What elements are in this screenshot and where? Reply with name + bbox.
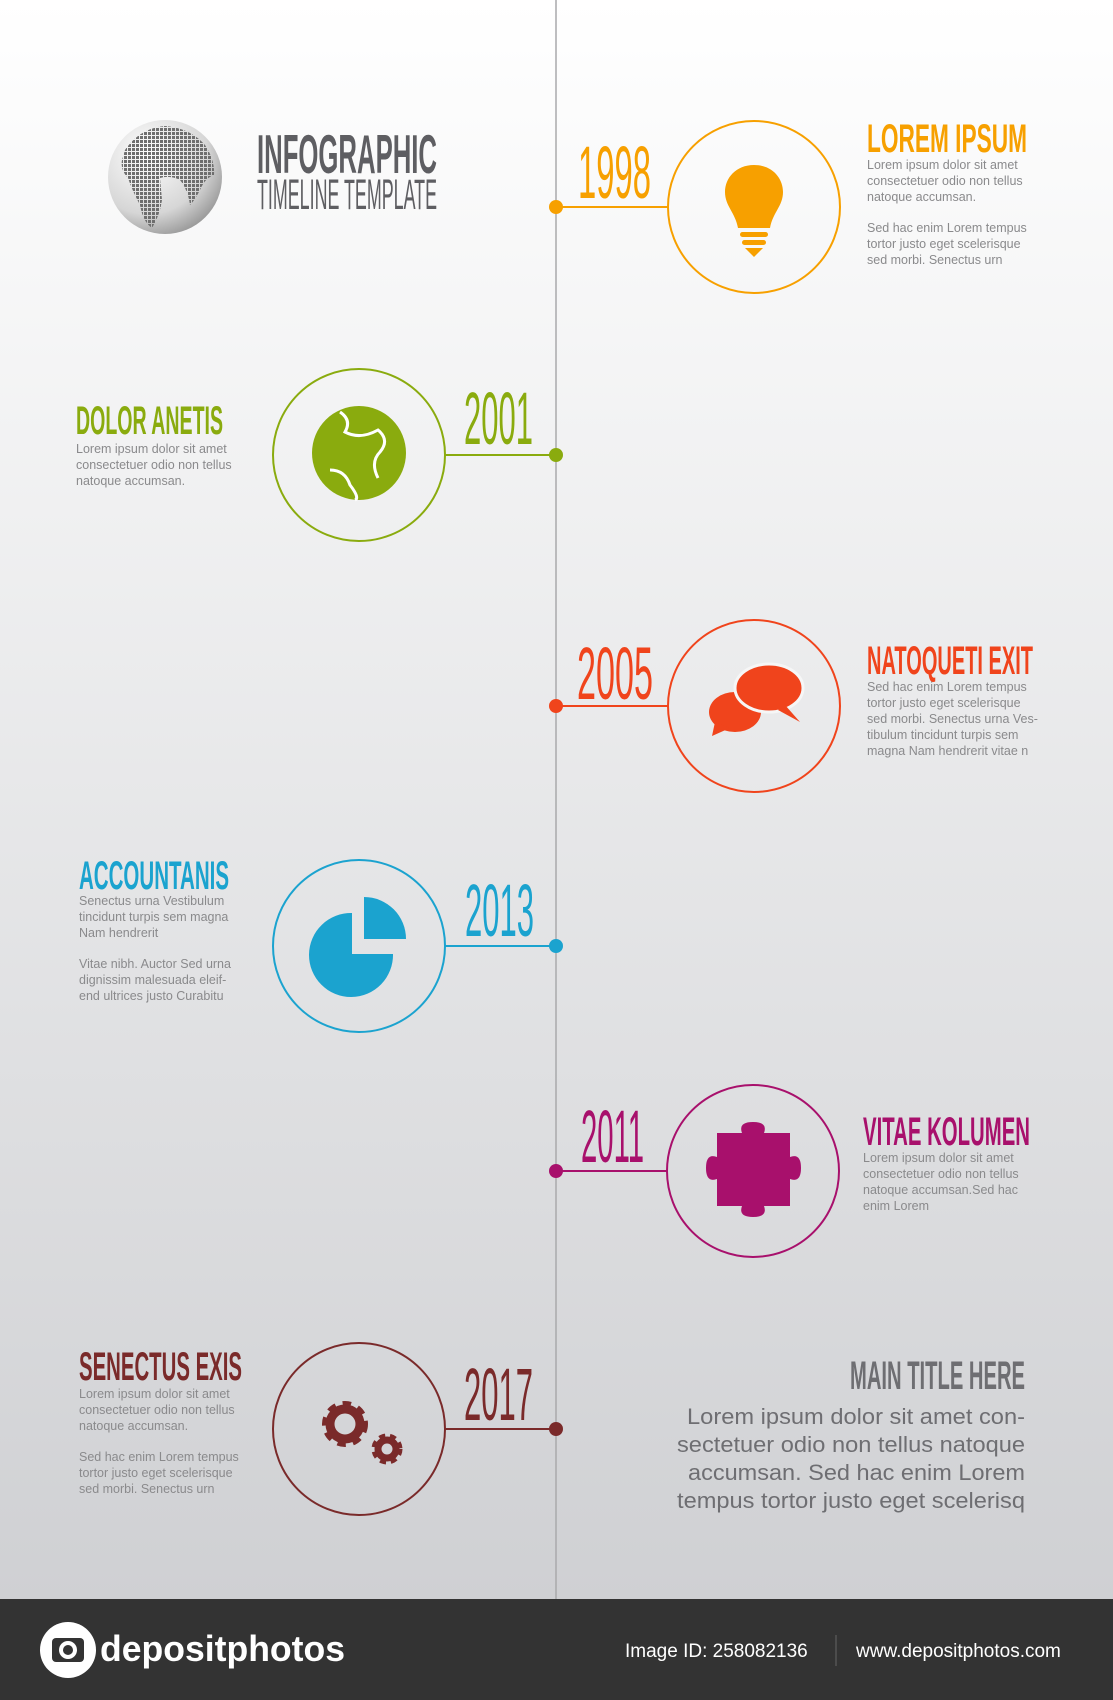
event 2011 (549, 1085, 1030, 1257)
event 2017: Lorem ipsum dolor sit amet (79, 1387, 230, 1401)
event 1998: natoque accumsan. (867, 190, 976, 204)
event 2005: sed morbi. Senectus urna Ves- (867, 712, 1038, 726)
event 2013: end ultrices justo Curabitu (79, 989, 224, 1003)
event 2013: Nam hendrerit (79, 926, 159, 940)
event 2013: Senectus urna Vestibulum (79, 894, 224, 908)
event 2011: consectetuer odio non tellus (863, 1167, 1019, 1181)
footer info: www.depositphotos.com (855, 1641, 1061, 1662)
footer logo: depositphotos (100, 1628, 345, 1669)
event 2005: tortor justo eget scelerisque (867, 696, 1021, 710)
text: INFOGRAPHIC (257, 123, 437, 185)
event 2013 (79, 854, 563, 1032)
event 2013: tincidunt turpis sem magna (79, 910, 228, 924)
event 2013: ACCOUNTANIS (79, 854, 229, 898)
icon: puzzle piece (706, 1122, 801, 1217)
event 2017: sed morbi. Senectus urn (79, 1482, 215, 1496)
event 2011: Lorem ipsum dolor sit amet (863, 1151, 1014, 1165)
event 2017 (79, 1343, 563, 1515)
icon: light bulb (725, 165, 783, 257)
event 1998: Sed hac enim Lorem tempus (867, 221, 1027, 235)
event 1998 (549, 117, 1027, 293)
timeline axis (555, 0, 557, 1599)
event 2005: Sed hac enim Lorem tempus (867, 680, 1027, 694)
event 2005: 2005 (577, 632, 653, 715)
icon: chat bubbles (709, 664, 803, 736)
event 2001: 2001 (464, 377, 533, 460)
icon: globe (108, 120, 222, 234)
event 2011: enim Lorem (863, 1199, 929, 1213)
event 2001: Lorem ipsum dolor sit amet (76, 442, 227, 456)
event 2011: natoque accumsan.Sed hac (863, 1183, 1018, 1197)
title text (257, 123, 437, 219)
main title block (677, 1354, 1025, 1513)
event 2017: Sed hac enim Lorem tempus (79, 1450, 239, 1464)
icon: earth (312, 406, 406, 500)
event 2001 (76, 369, 563, 541)
event 2001: natoque accumsan. (76, 474, 185, 488)
footer bar (0, 1599, 1113, 1700)
title block (108, 120, 437, 234)
event 2017: tortor justo eget scelerisque (79, 1466, 233, 1480)
event 2001: consectetuer odio non tellus (76, 458, 232, 472)
main title block: tempus tortor justo eget scelerisq (677, 1488, 1025, 1513)
icon: gears (328, 1407, 398, 1460)
event 2017: consectetuer odio non tellus (79, 1403, 235, 1417)
event 2013: Vitae nibh. Auctor Sed urna (79, 957, 231, 971)
main title block: sectetuer odio non tellus natoque (677, 1432, 1025, 1457)
event 2013: dignissim malesuada eleif- (79, 973, 226, 987)
text: TIMELINE TEMPLATE (257, 171, 437, 219)
footer info: Image ID: 258082136 (625, 1641, 808, 1662)
event 1998: 1998 (578, 131, 651, 214)
event 1998: consectetuer odio non tellus (867, 174, 1023, 188)
main title block: Lorem ipsum dolor sit amet con- (687, 1404, 1025, 1429)
event 1998: Lorem ipsum dolor sit amet (867, 158, 1018, 172)
event 2017: SENECTUS EXIS (79, 1345, 242, 1389)
event 2017: 2017 (464, 1353, 533, 1436)
event 1998: sed morbi. Senectus urn (867, 253, 1003, 267)
event 2005: magna Nam hendrerit vitae n (867, 744, 1028, 758)
event 2017: natoque accumsan. (79, 1419, 188, 1433)
event 1998: tortor justo eget scelerisque (867, 237, 1021, 251)
icon: pie chart (309, 897, 406, 997)
event 2013: 2013 (465, 869, 534, 952)
event 2005: tibulum tincidunt turpis sem (867, 728, 1018, 742)
event 2005 (549, 620, 1038, 792)
event 2001: DOLOR ANETIS (76, 399, 223, 443)
footer info (625, 1635, 1061, 1666)
footer logo (40, 1622, 345, 1678)
main title block: accumsan. Sed hac enim Lorem (688, 1460, 1025, 1485)
event 2011: 2011 (581, 1095, 644, 1178)
